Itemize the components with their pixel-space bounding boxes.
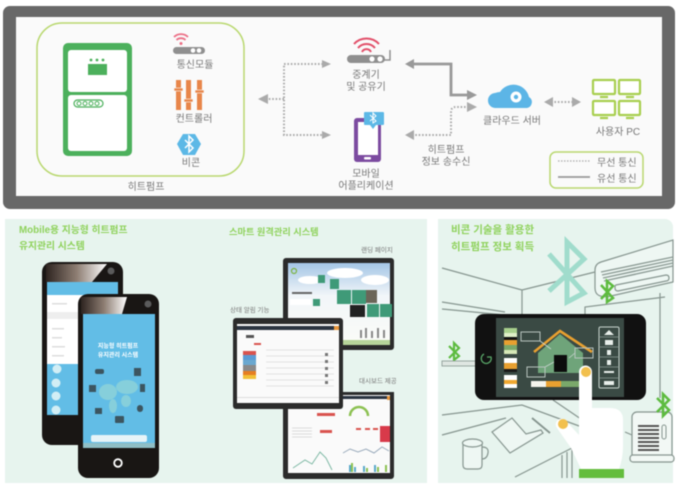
heading: beacon: 히트펌프 정보 획득: [451, 240, 534, 253]
icon: mobile application: [354, 112, 384, 162]
panel: beacon information: [438, 219, 674, 483]
illustration: dashboard tablet: [283, 392, 394, 479]
label: landing page: 랜딩 페이지: [361, 245, 393, 254]
icon: bluetooth left: [449, 343, 459, 360]
label: repeater: 및 공유기: [346, 81, 386, 93]
arrow: cloud to PC: [544, 97, 581, 107]
heading: mobile system: Mobile용 지능형 히트펌프: [19, 223, 128, 236]
icon: user PCs: [593, 80, 640, 118]
arrow: wired link to cloud: [405, 59, 477, 100]
arrow: wireless link to cloud: [405, 102, 477, 140]
app title: 유지관리 시스템: [98, 351, 138, 359]
icon: beacon: [177, 134, 201, 155]
side menu: [599, 327, 619, 388]
illustration: front phone: [78, 294, 159, 478]
panel: system diagram frame: [3, 6, 675, 209]
icon: communication module: [173, 34, 205, 54]
heading: mobile system: [19, 223, 128, 252]
label: mobile application: 모바일: [352, 168, 380, 180]
illustration: pointing hand: [556, 366, 624, 478]
heading: beacon: 비콘 기술을 활용한: [451, 223, 534, 236]
illustration: heat pump device: [630, 412, 674, 462]
icon: cloud server: [488, 85, 532, 108]
progress bar: [531, 381, 583, 387]
app title: 지능형 히트펌프: [98, 342, 139, 350]
illustration: desk book: [492, 418, 543, 453]
legend: 유선 통신: [597, 173, 637, 185]
label: cloud server: 클라우드 서버: [483, 115, 541, 127]
label: heat pump: 히트펌프: [128, 181, 164, 193]
icon: bluetooth on device: [657, 394, 669, 416]
label: repeater: 중계기: [352, 69, 380, 81]
illustration: back phone: [42, 262, 123, 445]
icon: house: [534, 331, 592, 373]
label: beacon: 비콘: [182, 157, 200, 169]
label: communication module: 통신모듈: [177, 59, 213, 71]
illustration: smartphone: [475, 314, 646, 400]
element: left wall unit: [442, 361, 477, 366]
legend: [550, 152, 643, 188]
illustration: pencil: [532, 418, 550, 433]
illustration: air conditioner: [595, 240, 673, 297]
icon: large bluetooth: [549, 242, 584, 302]
illustration: status alerts tablet: [233, 318, 343, 409]
icon: repeater router: [347, 39, 390, 63]
label: heat pump info exchange: [422, 144, 470, 168]
label: user PC: 사용자 PC: [596, 126, 640, 138]
app icons: [89, 368, 145, 423]
icon: power button: [481, 354, 491, 363]
label: heat pump info exchange: 히트펌프: [428, 144, 464, 156]
heading: remote management: 스마트 원격관리 시스템: [229, 226, 319, 237]
label: repeater: [346, 69, 386, 93]
sleeve: [579, 469, 624, 478]
label: controller: 컨트롤러: [176, 113, 212, 125]
label: heat pump info exchange: 정보 송수신: [422, 156, 470, 168]
house callouts: [521, 332, 593, 377]
heading: beacon: [451, 223, 534, 253]
illustration: room lines: [442, 268, 665, 478]
legend: 무선 통신: [597, 157, 637, 169]
illustration: landing page tablet: [283, 258, 394, 350]
status bars: [504, 328, 517, 388]
panel: mobile and remote management: [5, 219, 427, 483]
label: dashboard: 대시보드 제공: [359, 377, 397, 385]
arrow: heat pump wireless links: [258, 60, 331, 139]
label: mobile application: [338, 168, 394, 192]
icon: heat pump unit: [63, 43, 132, 156]
label: status alerts: 상태 알림 기능: [230, 305, 270, 314]
group: heat pump box: [37, 23, 244, 176]
illustration: mug: [462, 439, 488, 469]
icon: controller sliders: [174, 80, 204, 110]
label: mobile application: 어플리케이션: [338, 180, 394, 192]
world map: [99, 380, 138, 413]
heading: mobile system: 유지관리 시스템: [19, 240, 85, 252]
app title: [98, 342, 139, 359]
icon: bluetooth on air conditioner: [601, 281, 613, 302]
